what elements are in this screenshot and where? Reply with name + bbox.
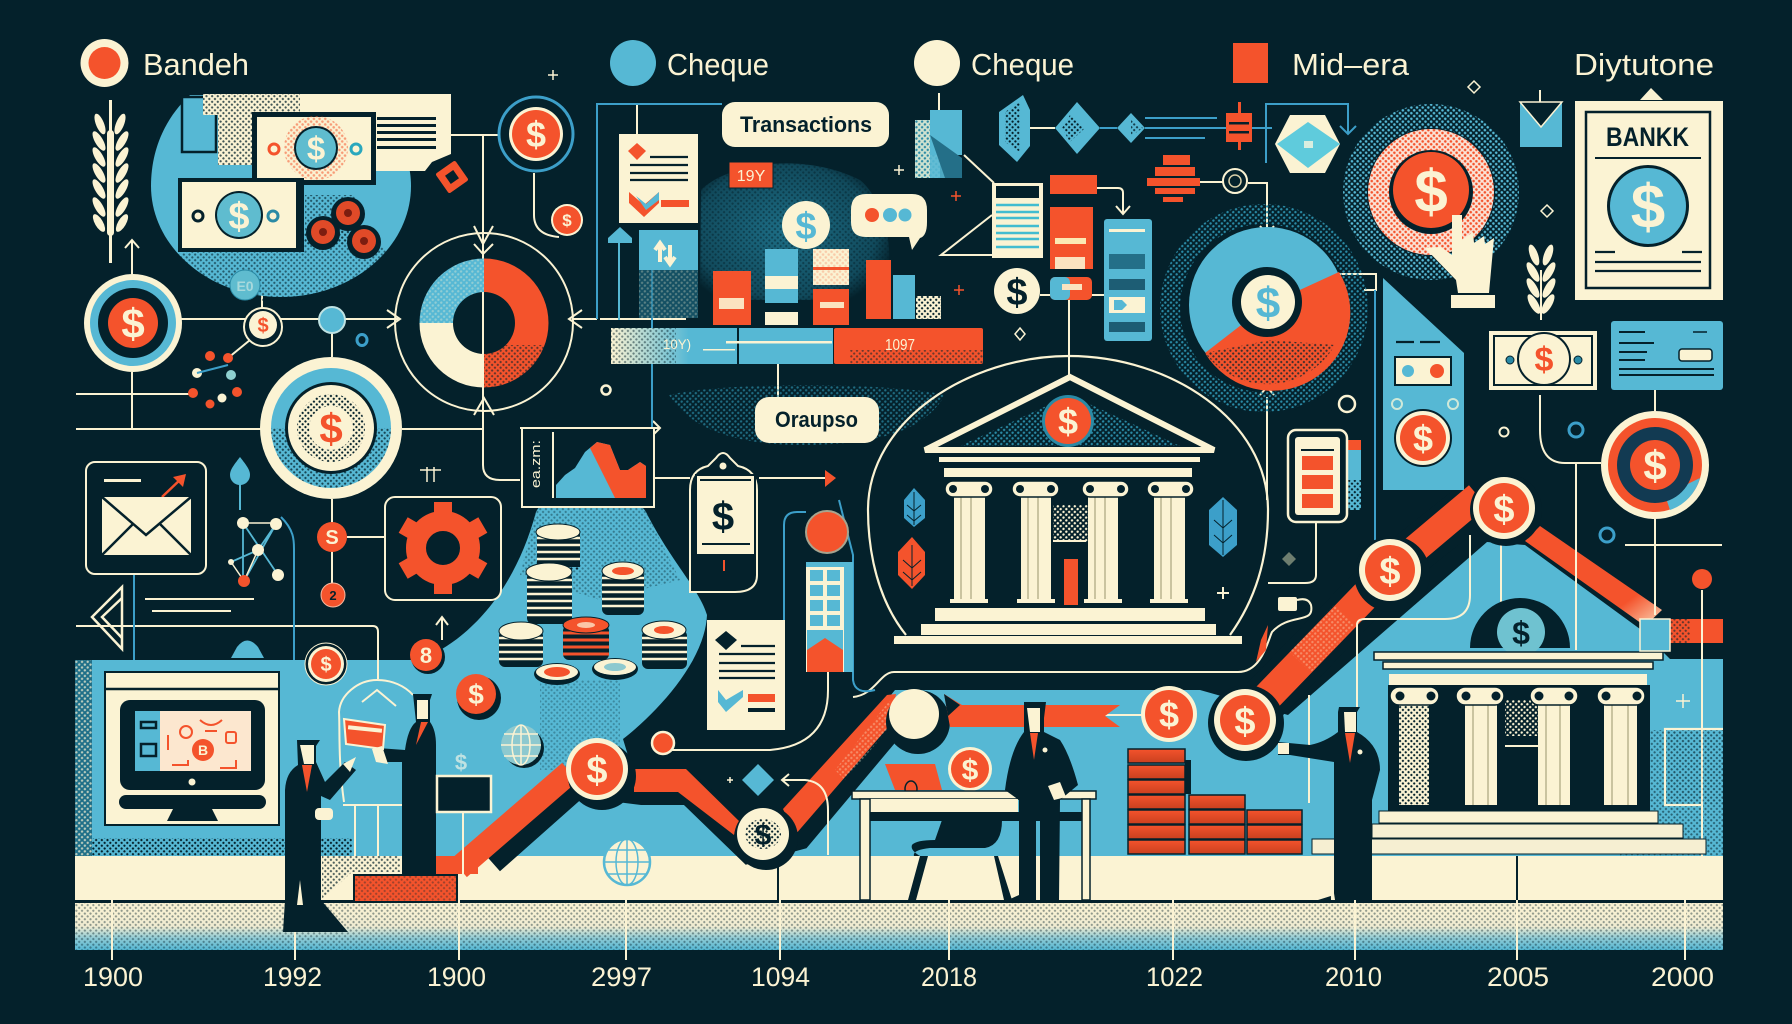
label: Transactions: Transactions <box>740 112 872 137</box>
columns <box>1390 687 1645 805</box>
timeline bar: 10Y) <box>663 336 691 352</box>
coin node: top centre <box>499 97 573 171</box>
blue halftone blob <box>700 163 889 300</box>
panel: small bank temple: $ <box>1512 615 1530 651</box>
arrow: red right <box>825 470 836 487</box>
icon: blue envelope <box>1520 90 1562 147</box>
stack <box>563 617 609 660</box>
coin: $ <box>1493 489 1515 531</box>
cream circle <box>886 689 950 754</box>
coin node: right <box>1601 411 1709 519</box>
coin: $ <box>1379 551 1401 593</box>
legend: Bandeh: Bandeh <box>143 47 249 82</box>
icon: globe <box>501 725 544 768</box>
milestone coins on timeline <box>566 474 1542 870</box>
icon: red stacked shape <box>1147 155 1200 202</box>
panel: area chart <box>522 428 654 507</box>
icon: red lantern <box>1226 102 1252 150</box>
panel: area chart: ea.zm: <box>528 440 543 488</box>
coin <box>1354 536 1430 612</box>
year: 1900 <box>83 962 143 992</box>
icon: blue stand <box>231 640 264 658</box>
year: 1022 <box>1146 962 1203 992</box>
coin: blue dollar: $ <box>795 206 817 248</box>
steps <box>1379 811 1658 823</box>
coin: red small <box>321 583 345 607</box>
banknote upper <box>252 112 376 185</box>
icon: blue flag <box>915 110 962 178</box>
red pedestal <box>322 856 457 902</box>
dot network <box>188 351 242 408</box>
coin <box>566 738 636 810</box>
red coin stacks <box>1128 749 1302 854</box>
panel: monitor <box>92 661 302 838</box>
blue box with arrows <box>639 230 698 318</box>
icon: gem <box>1275 115 1340 173</box>
coin <box>1208 685 1284 761</box>
floor band <box>75 856 1723 950</box>
coin: number 8 <box>410 639 445 674</box>
coin: dollar on blue <box>456 674 501 720</box>
panel: monitor: B <box>198 742 208 758</box>
panel: BANK document: BANKK <box>1606 122 1689 152</box>
icon: blue leaf left <box>904 488 925 527</box>
document lower <box>707 620 785 730</box>
label: Transactions <box>722 102 889 147</box>
icon: banknote right: $ <box>1535 341 1554 379</box>
small coin <box>551 204 583 236</box>
icon: wheat <box>90 100 131 263</box>
legend: Cheque blue: Cheque <box>667 47 769 82</box>
small node coin <box>244 308 282 346</box>
label: Oraupso <box>755 397 879 443</box>
coin node: right: $ <box>1643 442 1667 489</box>
coin on desk: $ <box>962 754 979 787</box>
blue scene backdrop <box>75 494 1723 856</box>
banner stripes <box>377 117 436 149</box>
year: 1992 <box>263 962 322 992</box>
legend: Bandeh <box>80 39 249 87</box>
coin in pediment: $ <box>1058 401 1078 442</box>
legend: Mid-era: Mid–era <box>1292 47 1410 82</box>
figure: banker right <box>1278 707 1380 900</box>
coin node: top centre: $ <box>526 114 546 155</box>
banknote lower: $ <box>228 196 250 238</box>
timeline bar <box>611 328 983 364</box>
icon: target button and hand <box>1343 104 1519 308</box>
coin <box>734 806 798 870</box>
small red dot node <box>652 732 674 754</box>
laptop <box>885 764 942 790</box>
red tall panel <box>1050 207 1093 269</box>
small rings <box>1339 396 1614 542</box>
figure: banker left <box>283 740 356 932</box>
sparkle marks <box>420 70 1690 708</box>
blue connector lines <box>134 104 1375 691</box>
year: 1900 <box>427 962 486 992</box>
coin: red chip: $ <box>320 654 332 676</box>
arrow: small up <box>436 617 448 640</box>
icon: blue drop <box>230 457 250 485</box>
arrow: blue up <box>608 227 632 320</box>
coin in pediment <box>1042 395 1094 447</box>
panel: desk scene <box>852 702 1096 900</box>
coin node: large left <box>84 274 182 372</box>
timeline axis and years <box>83 900 1714 992</box>
icon: target button and hand: $ <box>1414 158 1448 225</box>
year: 2997 <box>591 962 652 992</box>
columns <box>945 481 1194 603</box>
panel: small bank temple <box>1312 598 1706 854</box>
figure: banker with card <box>344 694 436 875</box>
red block <box>1050 175 1097 194</box>
pie chart <box>1170 214 1358 402</box>
small ring <box>602 386 610 394</box>
small blue badge <box>230 270 260 300</box>
icon: credit card <box>1611 321 1723 390</box>
banknote upper: $ <box>307 130 325 167</box>
small ring node <box>1223 169 1247 193</box>
stack <box>526 563 572 624</box>
coin: $ <box>755 819 772 852</box>
panel: BANK document <box>1575 88 1723 300</box>
label: Oraupso: Oraupso <box>775 407 858 432</box>
document with blue rows <box>992 183 1043 258</box>
year: 2000 <box>1651 962 1714 992</box>
legend: Mid-era <box>1233 43 1410 83</box>
icon: blue leaf right <box>1209 497 1237 557</box>
panel: main bank with dome <box>868 356 1268 644</box>
stack <box>602 562 644 615</box>
small marks <box>1217 552 1297 662</box>
connector lines <box>76 93 1722 905</box>
desk top <box>852 791 1096 799</box>
network graph <box>228 517 284 587</box>
node: blue dot <box>319 307 345 333</box>
label: 19Y: 19Y <box>737 168 766 185</box>
pin <box>1692 569 1712 589</box>
icon: red tag <box>435 160 469 194</box>
panel: blue kiosk: $ <box>1413 418 1433 459</box>
pediment <box>925 377 1214 450</box>
node: blue ring <box>357 334 367 346</box>
red tokens <box>306 197 381 259</box>
icon: gear box <box>385 497 501 600</box>
coin <box>1141 686 1197 742</box>
icon: blue diamond <box>727 764 774 796</box>
coin: dark dollar: $ <box>1006 272 1028 314</box>
coin: red chip <box>305 643 347 685</box>
coin node: large left: $ <box>121 300 145 347</box>
connector chip <box>1050 277 1092 300</box>
panel: BANK document: $ <box>1631 173 1665 242</box>
icon: banknote right <box>1489 331 1597 390</box>
dome <box>868 356 1268 635</box>
legend: Cheque blue <box>610 40 769 86</box>
small coin: $ <box>562 211 572 230</box>
icon: red leaf <box>898 537 925 589</box>
chips <box>534 658 638 685</box>
halftone shadow behind label <box>669 385 945 445</box>
coin: red S <box>317 522 347 552</box>
coin: plain red <box>806 511 848 553</box>
cream banner <box>203 94 451 171</box>
coin: $ <box>586 750 608 792</box>
year: 1094 <box>751 962 810 992</box>
icon: tall building <box>806 562 853 672</box>
steps <box>935 608 1205 621</box>
year: 2018 <box>921 962 977 992</box>
icon: price tag <box>690 453 757 592</box>
small node coin: $ <box>257 315 269 337</box>
coin: dollar on blue: $ <box>468 679 484 710</box>
icon: small dollar: $ <box>455 750 467 775</box>
rising red timeline arrow <box>436 496 1723 874</box>
coin: dark dollar <box>994 268 1040 314</box>
coin <box>1470 474 1542 546</box>
coin on desk <box>948 747 992 791</box>
banknote lower <box>178 178 304 252</box>
panel: document upper <box>619 134 698 223</box>
coin: number 8: 8 <box>420 643 432 668</box>
timeline bar: 1097 <box>885 337 915 354</box>
ribbon arrow <box>944 694 1120 727</box>
blue tower <box>1104 219 1152 341</box>
coin: $ <box>1234 701 1256 743</box>
panel: banknotes circle <box>151 94 451 302</box>
coin: $ <box>1159 694 1179 735</box>
legend: Cheque cream <box>914 40 1074 86</box>
sign board <box>437 776 491 812</box>
panel: blue kiosk <box>1383 278 1464 490</box>
blue house frame <box>1640 619 1723 805</box>
icon: connected diamonds <box>999 95 1145 162</box>
figure: banker at desk <box>1005 702 1078 900</box>
icon: envelope box <box>86 462 206 574</box>
year: 2010 <box>1325 962 1382 992</box>
coin: red S: S <box>325 527 339 549</box>
bar chart <box>713 249 941 325</box>
stack <box>642 621 687 669</box>
chair <box>908 820 1012 900</box>
coin node: target ring <box>260 357 402 499</box>
legend: Diytutone: Diytutone <box>1574 47 1714 82</box>
coin: red small: 2 <box>329 588 337 603</box>
small blue badge: E0 <box>236 278 254 294</box>
donut chart <box>387 226 582 415</box>
icon: globe on floor <box>604 839 650 885</box>
arrow: left chevron <box>92 587 122 649</box>
pie chart: $ <box>1256 279 1280 328</box>
coin: blue dollar <box>782 201 830 249</box>
icon: price tag: $ <box>712 495 734 539</box>
coin node: target ring: $ <box>319 405 343 452</box>
label: 19Y <box>729 162 773 188</box>
stack <box>536 524 580 570</box>
icon: wheat right <box>1524 243 1558 320</box>
year: 2005 <box>1487 962 1549 992</box>
coin stacks <box>499 524 687 685</box>
speech bubble <box>851 194 927 250</box>
stack <box>499 622 543 667</box>
legend: Cheque cream: Cheque <box>971 47 1074 82</box>
icon: phone <box>1288 430 1361 522</box>
